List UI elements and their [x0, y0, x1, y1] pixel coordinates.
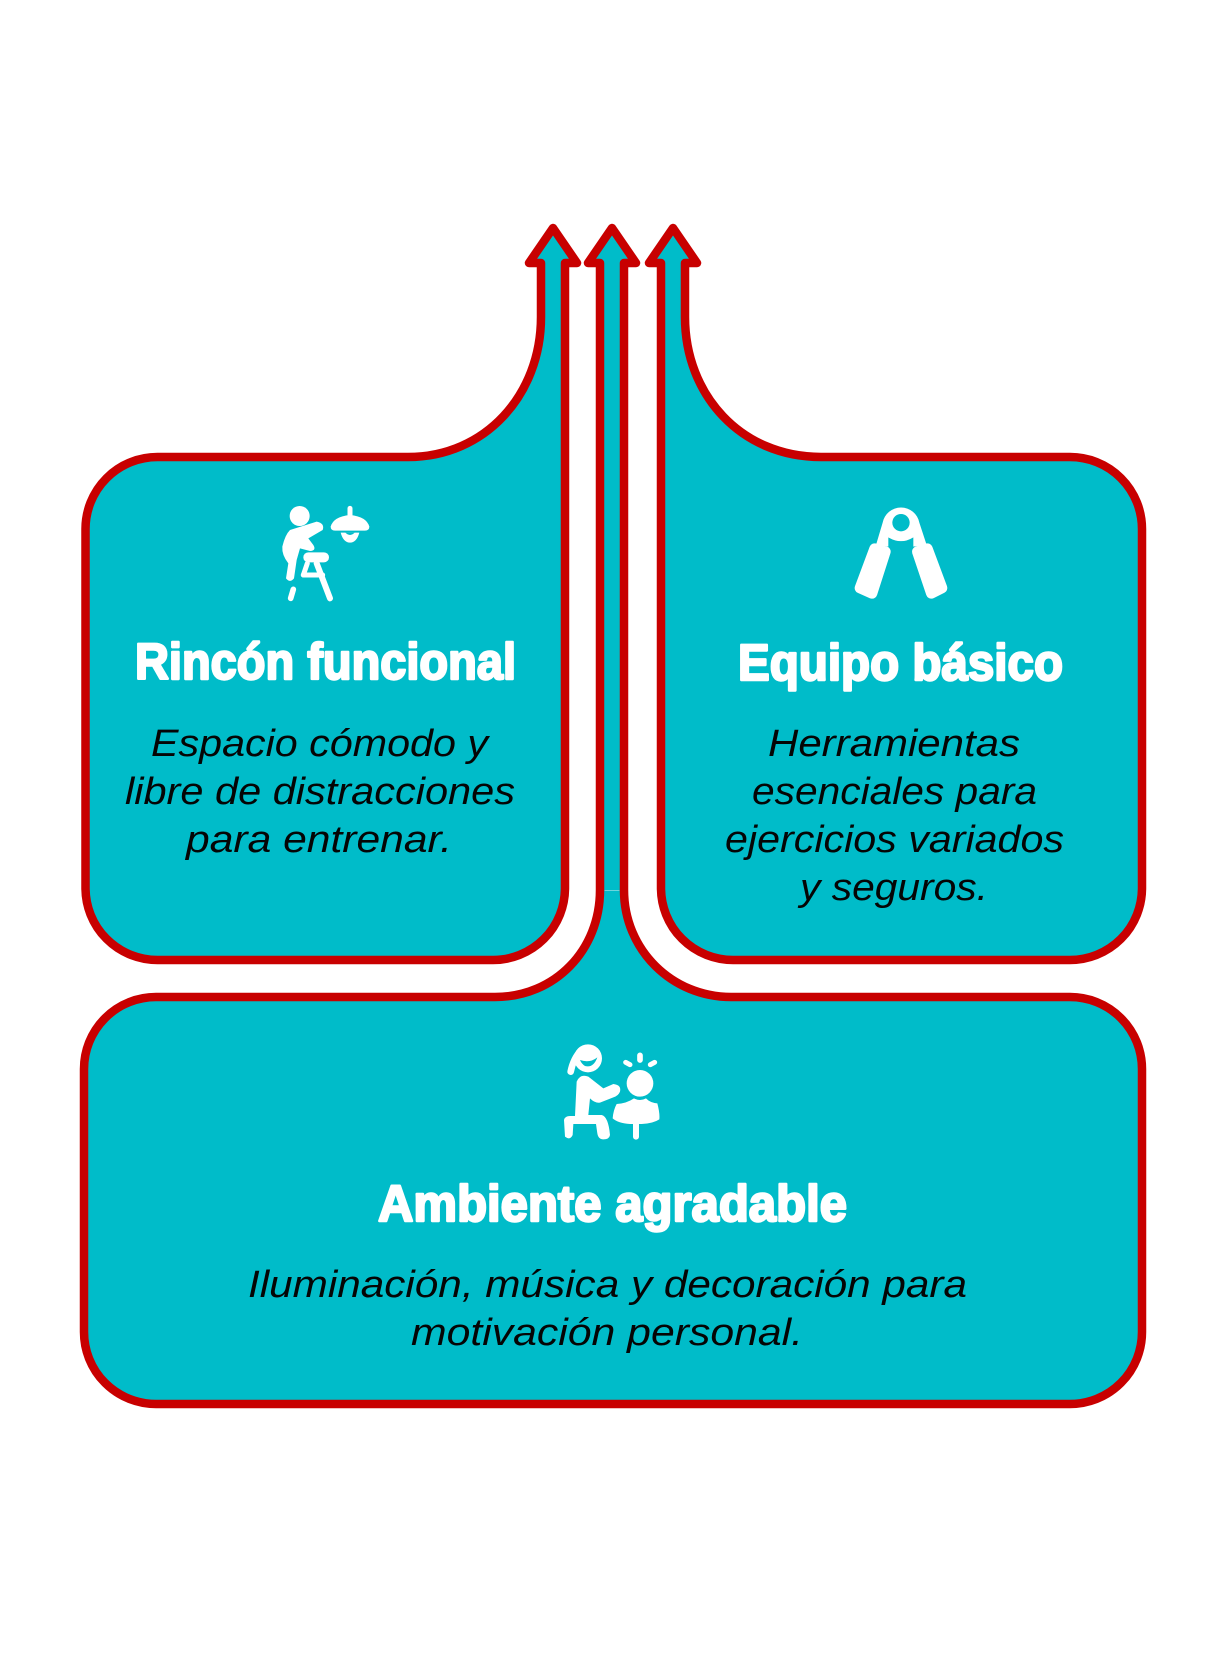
text: equipo description: y seguros. — [797, 867, 988, 909]
text: rincón description: para entrenar. — [185, 819, 452, 861]
text: equipo description — [725, 723, 1064, 909]
right arrow and box shape — [649, 228, 1142, 960]
center arrow and bottom box shape — [84, 228, 1142, 1404]
text: equipo description: esenciales para — [752, 771, 1037, 813]
text: rincón description — [125, 723, 515, 861]
icon: child on stool reaching lamp — [282, 506, 369, 598]
heading: Rincón funcional: Rincón funcional — [135, 633, 516, 690]
text: equipo description: Herramientas — [768, 723, 1020, 765]
text: equipo description: ejercicios variados — [725, 819, 1064, 861]
panel: ambiente agradable — [84, 228, 1142, 1404]
text: rincón description: Espacio cómodo y — [151, 723, 490, 765]
text: ambiente description: Iluminación, música y decoración para — [248, 1264, 967, 1306]
panel: equipo básico — [649, 228, 1142, 960]
text: rincón description: libre de distracciones — [125, 771, 515, 813]
heading: Ambiente agradable: Ambiente agradable — [378, 1175, 847, 1232]
text: ambiente description: motivación personal. — [411, 1312, 803, 1354]
left arrow and box shape — [86, 228, 577, 960]
panel: rincón funcional — [86, 228, 577, 960]
text: ambiente description — [248, 1264, 967, 1354]
heading: Equipo básico: Equipo básico — [738, 634, 1063, 691]
icon: woman with child and book — [564, 1044, 659, 1139]
icon: hand grip — [860, 508, 942, 593]
